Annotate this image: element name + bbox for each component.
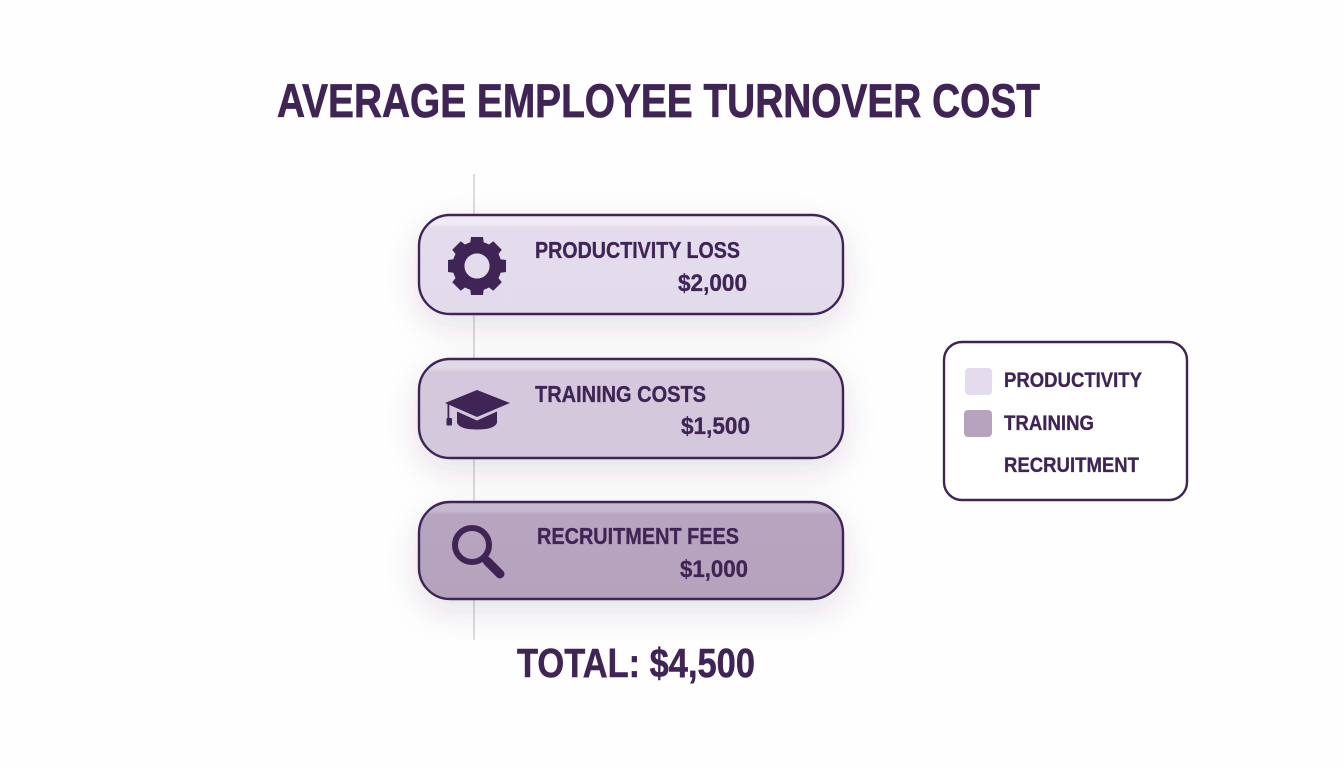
icon: magnifying glass	[455, 528, 500, 574]
total: TOTAL: $4,500	[517, 640, 755, 686]
value: $1,000: $1,000	[680, 556, 748, 583]
legend	[944, 342, 1187, 500]
label: training costs: TRAINING COSTS	[535, 381, 706, 407]
value: $1,500: $1,500	[681, 413, 750, 440]
legend swatch: training	[964, 410, 992, 437]
value: $2,000: $2,000	[678, 270, 747, 297]
legend swatch: productivity	[965, 368, 992, 395]
panel: training costs	[419, 359, 843, 458]
label: productivity loss: PRODUCTIVITY LOSS	[535, 237, 740, 263]
icon: graduation cap	[445, 390, 510, 430]
vertical axis line	[473, 174, 475, 640]
panel: productivity loss	[419, 215, 843, 314]
icon: gear	[448, 237, 506, 295]
panel: recruitment fees	[419, 502, 843, 599]
legend label: recruitment: RECRUITMENT	[1004, 454, 1139, 477]
title: AVERAGE EMPLOYEE TURNOVER COST	[277, 74, 1040, 127]
legend label: training: TRAINING	[1004, 412, 1094, 435]
label: recruitment fees: RECRUITMENT FEES	[537, 523, 739, 549]
legend label: productivity: PRODUCTIVITY	[1004, 369, 1142, 392]
